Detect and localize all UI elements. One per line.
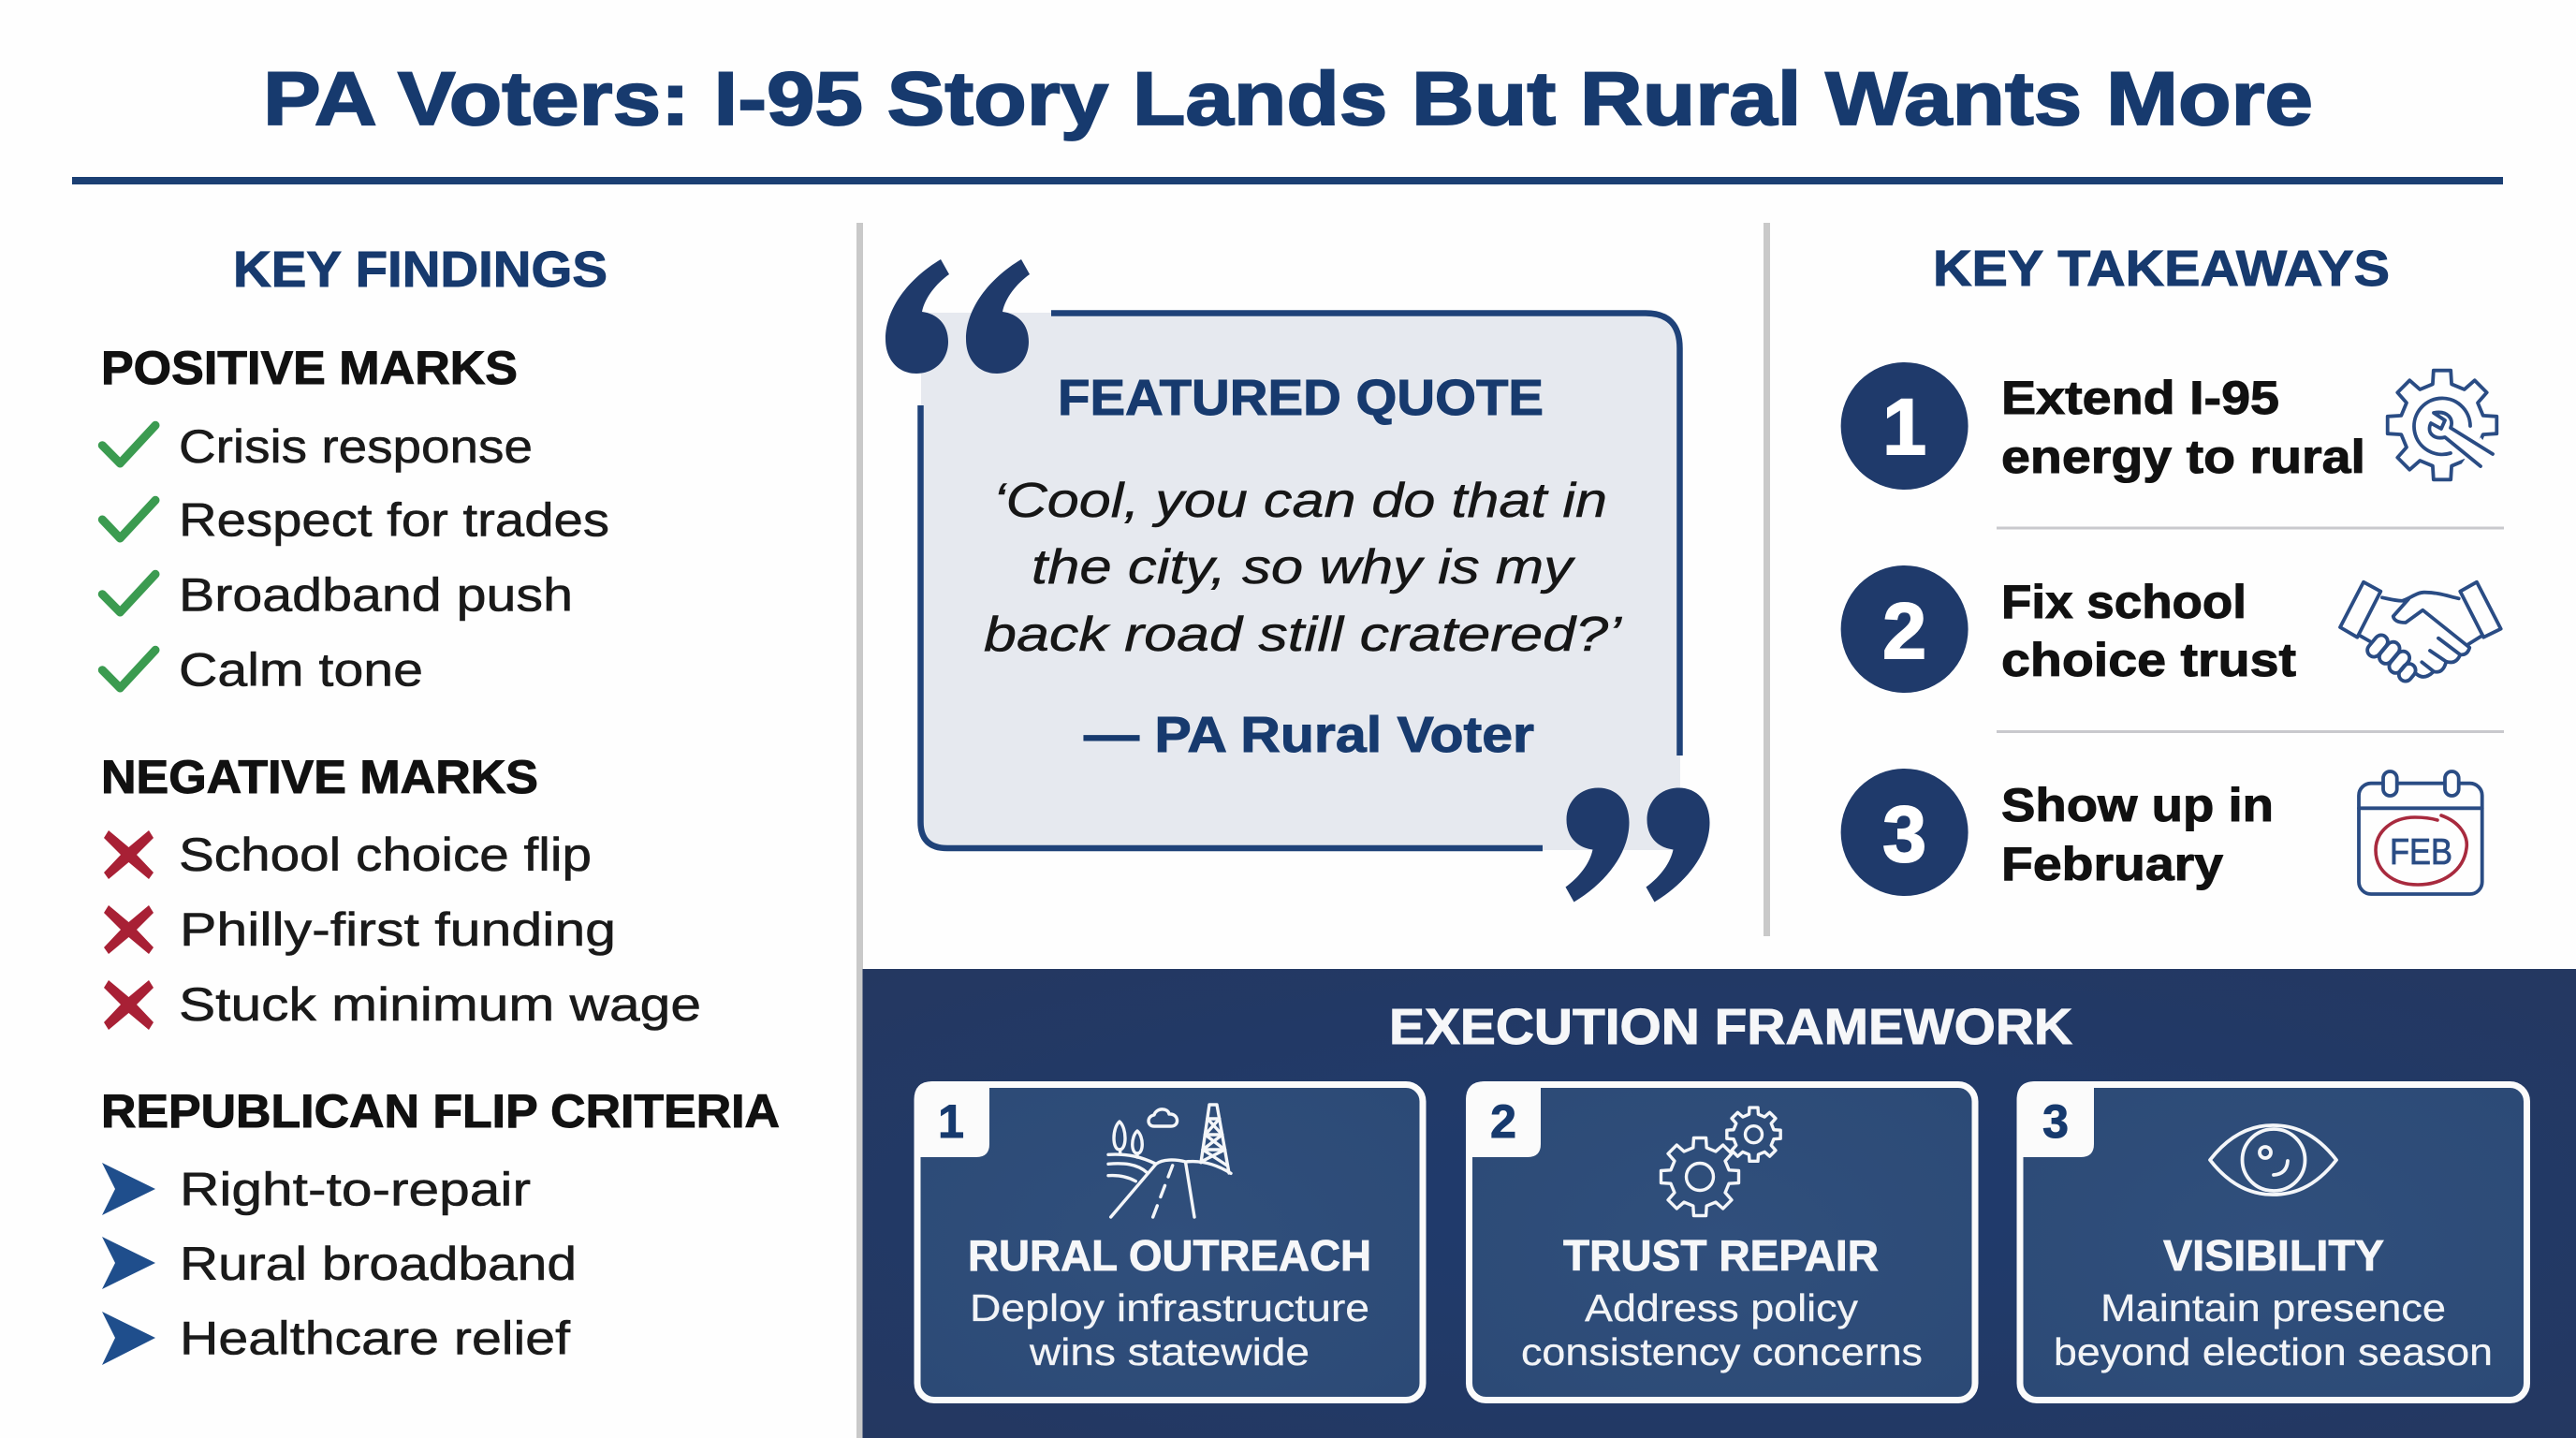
list: positive marks: Respect for trades <box>179 494 609 547</box>
icon: calendar FEB <box>2359 771 2482 894</box>
heading: key takeaways: KEY TAKEAWAYS <box>1933 241 2390 297</box>
quote attribution: — PA Rural Voter <box>1084 707 1534 763</box>
number badge 1 <box>1841 362 1969 490</box>
title: PA Voters: I-95 Story Lands But Rural Wants More <box>263 57 2313 141</box>
takeaway text 2 <box>2001 576 2296 686</box>
icon: gears <box>1661 1108 1780 1215</box>
quote box border <box>921 313 1679 848</box>
list: positive marks: Calm tone <box>179 644 423 697</box>
card 3: visibility <box>2016 1081 2527 1401</box>
heading: key findings: KEY FINDINGS <box>233 242 607 298</box>
number badge 3 <box>1841 769 1969 896</box>
takeaway 1 <box>1841 362 2504 490</box>
icon: opening quote mark <box>886 259 1030 374</box>
list: positive marks: Crisis response <box>179 420 533 473</box>
quote text: back road still cratered?’ <box>984 608 1623 662</box>
card title: VISIBILITY <box>2163 1231 2384 1280</box>
card title: TRUST REPAIR <box>1563 1231 1879 1280</box>
card 1: rural outreach <box>914 1081 1423 1401</box>
icon: calendar FEB: FEB <box>2390 832 2452 873</box>
icon: cross <box>104 905 154 954</box>
takeaway text 3: February <box>2001 838 2223 890</box>
panel: key findings <box>101 242 780 1365</box>
heading: negative marks: NEGATIVE MARKS <box>101 751 538 803</box>
icon: arrow <box>102 1163 155 1215</box>
panel: key takeaways <box>1841 241 2504 896</box>
number badge 1: 1 <box>1882 383 1926 471</box>
takeaway text 2: Fix school <box>2001 576 2247 628</box>
takeaway text 1 <box>2001 372 2365 483</box>
panel: execution framework <box>863 969 2576 1438</box>
card title: RURAL OUTREACH <box>968 1231 1371 1280</box>
list: republican flip criteria <box>102 1163 577 1365</box>
heading: featured quote: FEATURED QUOTE <box>1058 370 1544 426</box>
card description <box>2054 1286 2493 1373</box>
card description: Maintain presence <box>2100 1286 2446 1329</box>
icon: handshake <box>2340 582 2501 683</box>
quote text: the city, so why is my <box>1032 540 1576 594</box>
takeaway text 1: energy to rural <box>2001 431 2365 483</box>
takeaway 2 <box>1841 565 2501 693</box>
number badge 2: 2 <box>1882 587 1926 675</box>
card description: Deploy infrastructure <box>970 1286 1369 1329</box>
icon: gear with wrench <box>2388 371 2504 483</box>
card description: Address policy <box>1585 1286 1859 1329</box>
icon: check <box>102 500 155 538</box>
list: republican flip criteria: Right-to-repair <box>180 1163 531 1215</box>
quote text <box>984 474 1623 662</box>
icon: rural road and tower <box>1108 1105 1231 1217</box>
heading: execution framework: EXECUTION FRAMEWORK <box>1389 999 2072 1055</box>
quote box fill <box>921 313 1680 850</box>
panel: featured quote <box>886 259 1709 902</box>
badge 2 <box>1466 1081 1541 1157</box>
number badge 3: 3 <box>1882 790 1926 878</box>
list: positive marks: Broadband push <box>179 569 573 622</box>
card description <box>1521 1286 1923 1373</box>
list: positive marks <box>102 420 609 697</box>
list: negative marks: School choice flip <box>179 829 592 881</box>
card description: consistency concerns <box>1521 1330 1923 1373</box>
icon: cross <box>104 980 154 1030</box>
card description <box>970 1286 1369 1373</box>
number badge 2 <box>1841 565 1969 693</box>
badge 3: 3 <box>2042 1095 2069 1148</box>
icon: check <box>102 574 155 612</box>
takeaway text 1: Extend I-95 <box>2001 372 2279 424</box>
badge 3 <box>2016 1081 2094 1157</box>
quote text: ‘Cool, you can do that in <box>993 474 1607 528</box>
icon: arrow <box>102 1312 155 1365</box>
icon: arrow <box>102 1237 155 1289</box>
icon: check <box>102 650 155 688</box>
icon: cross <box>104 830 154 879</box>
card description: wins statewide <box>1029 1330 1310 1373</box>
takeaway text 2: choice trust <box>2001 634 2296 686</box>
badge 1: 1 <box>938 1095 964 1148</box>
heading: positive marks: POSITIVE MARKS <box>101 342 518 394</box>
card description: beyond election season <box>2054 1330 2493 1373</box>
icon: eye <box>2210 1125 2336 1195</box>
list: negative marks: Stuck minimum wage <box>179 978 701 1031</box>
list: republican flip criteria: Healthcare relief <box>180 1313 570 1365</box>
icon: closing quote mark <box>1565 788 1709 902</box>
list: negative marks <box>104 829 701 1031</box>
list: negative marks: Philly-first funding <box>180 903 616 956</box>
card 2: trust repair <box>1466 1081 1975 1401</box>
heading: republican flip criteria: REPUBLICAN FLIP CRITERIA <box>101 1085 780 1137</box>
list: republican flip criteria: Rural broadband <box>180 1238 577 1290</box>
badge 1 <box>914 1081 989 1157</box>
icon: check <box>102 425 155 463</box>
takeaway text 3 <box>2001 779 2274 890</box>
badge 2: 2 <box>1490 1095 1516 1148</box>
takeaway 3 <box>1841 769 2482 896</box>
takeaway text 3: Show up in <box>2001 779 2274 831</box>
